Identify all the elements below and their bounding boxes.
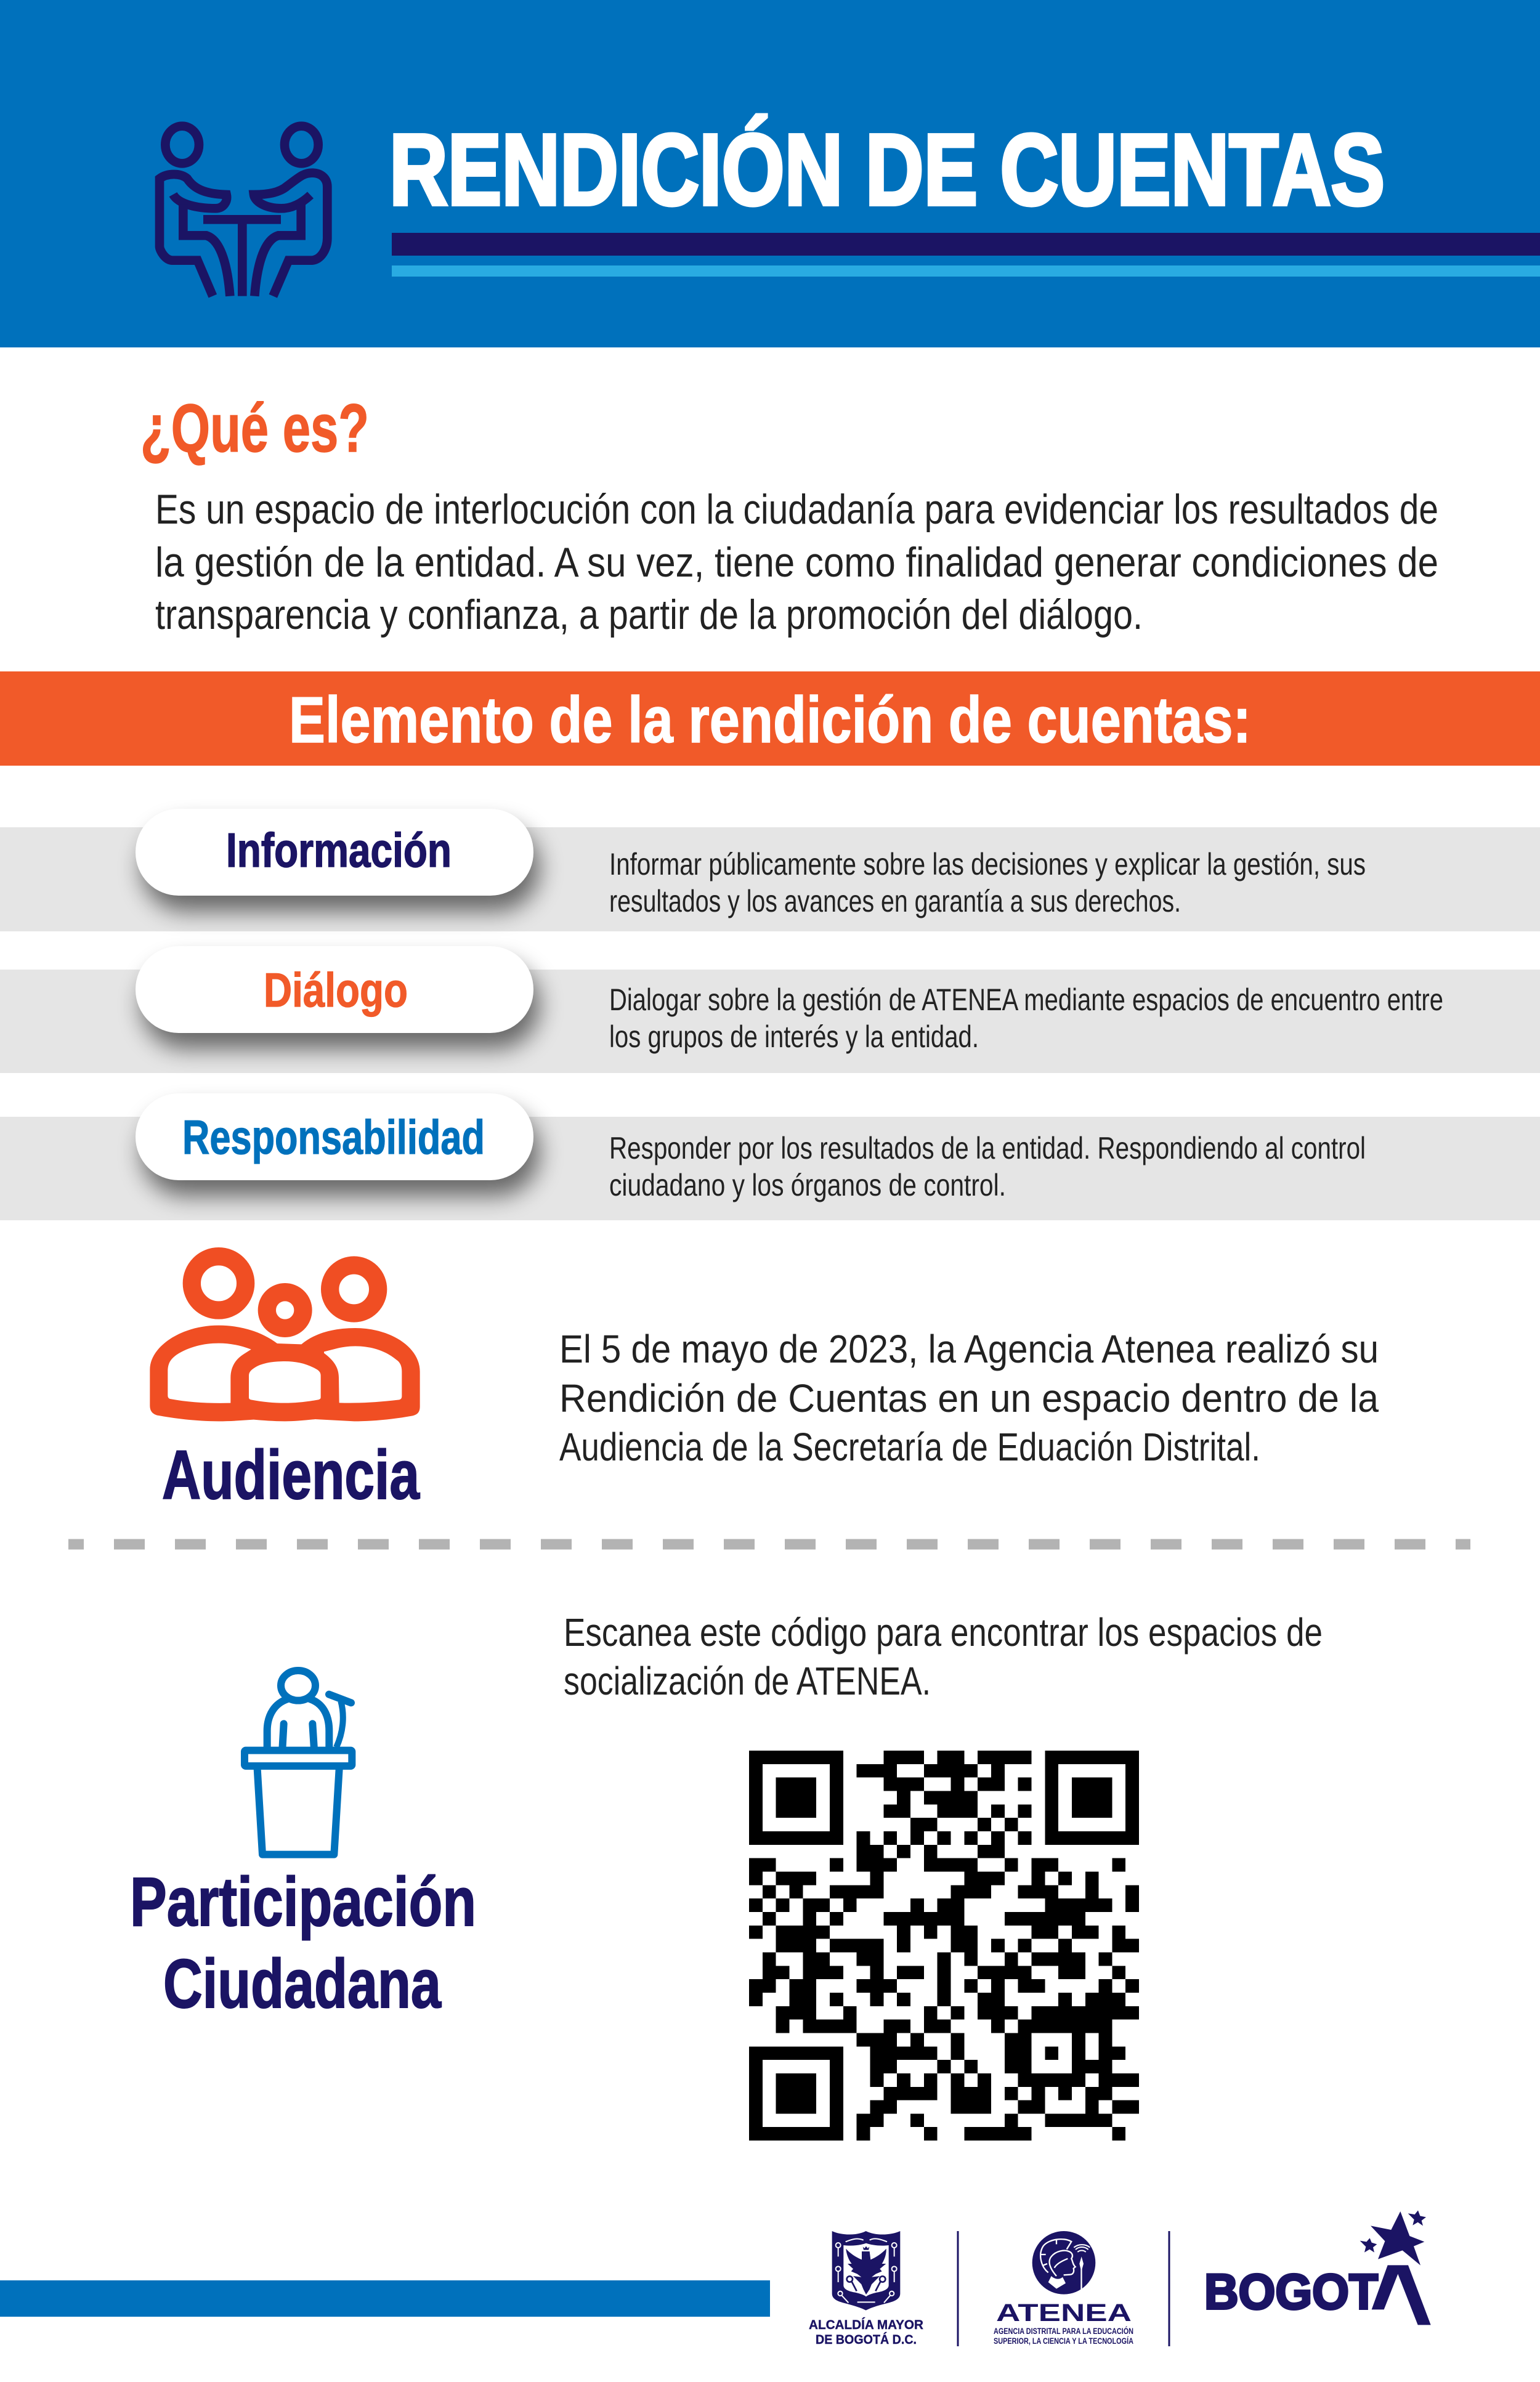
logo subtitle: AGENCIA DISTRITAL PARA LA EDUCACIÓN: [994, 2327, 1133, 2336]
logo text: ATENEA: [996, 2299, 1132, 2327]
icon: audience of three people: [150, 1257, 420, 1421]
label: Audiencia: [162, 1436, 420, 1513]
description: El 5 de mayo de 2023, la Agencia Atenea realizó su: [559, 1327, 1379, 1371]
scan instruction text: socialización de ATENEA.: [564, 1659, 931, 1703]
label: [130, 1863, 476, 2022]
description: [609, 847, 1366, 918]
description: [609, 982, 1443, 1054]
logo text: DE BOGOTÁ D.C.: [816, 2331, 917, 2347]
orange section band: [0, 671, 1540, 766]
logo: Atenea: [994, 2231, 1133, 2346]
section: Audiencia: [150, 1257, 1379, 1513]
icon: speaker at podium: [245, 1671, 352, 1855]
row: Diálogo: [0, 946, 1540, 1073]
logo: Bogotá: BOGOT: [1204, 2264, 1378, 2320]
logo: Bogotá: [1204, 2210, 1431, 2325]
section: Participación Ciudadana: [130, 1671, 476, 2022]
description: ciudadano y los órganos de control.: [609, 1168, 1006, 1202]
pill label: Diálogo: [264, 963, 408, 1017]
row: Información: [0, 809, 1540, 931]
description: resultados y los avances en garantía a sus derechos.: [609, 884, 1181, 918]
description: Responder por los resultados de la entidad. Respondiendo al control: [609, 1131, 1366, 1165]
title underline bars: [392, 233, 1540, 277]
QR code: [749, 1751, 1139, 2141]
paragraph: transparencia y confianza, a partir de la promoción del diálogo.: [155, 591, 1143, 638]
logo subtitle: SUPERIOR, LA CIENCIA Y LA TECNOLOGÍA: [994, 2336, 1133, 2346]
description: [609, 1131, 1366, 1202]
footer blue bar: [0, 2280, 770, 2317]
paragraph: [155, 486, 1438, 638]
description: [559, 1327, 1379, 1469]
pill label: Información: [226, 823, 452, 877]
logo subtitle: [994, 2327, 1133, 2346]
pill label: Responsabilidad: [182, 1110, 485, 1164]
crest: [832, 2231, 900, 2311]
heading: ¿Qué es?: [140, 391, 369, 466]
band heading: Elemento de la rendición de cuentas:: [289, 684, 1251, 756]
description: Informar públicamente sobre las decisiones y explicar la gestión, sus: [609, 847, 1366, 881]
header banner: [0, 0, 1540, 347]
logo: Alcaldía Mayor de Bogotá: [809, 2231, 923, 2347]
description: Rendición de Cuentas en un espacio dentro de la: [559, 1376, 1379, 1420]
emblem: [1032, 2231, 1095, 2295]
icon: two people meeting at a table: [160, 126, 327, 296]
logo text: [809, 2317, 923, 2347]
scan instruction text: Escanea este código para encontrar los espacios de: [564, 1610, 1323, 1655]
label: Participación: [130, 1863, 476, 1940]
logo text: ALCALDÍA MAYOR: [809, 2317, 923, 2332]
scan instruction text: [564, 1610, 1323, 1703]
description: los grupos de interés y la entidad.: [609, 1019, 979, 1054]
section: what is it: [140, 391, 1438, 638]
label: Ciudadana: [163, 1945, 442, 2022]
description: Audiencia de la Secretaría de Eduación Distrital.: [559, 1425, 1260, 1469]
row: Responsabilidad: [0, 1093, 1540, 1220]
stars and letter A: [1360, 2210, 1431, 2325]
